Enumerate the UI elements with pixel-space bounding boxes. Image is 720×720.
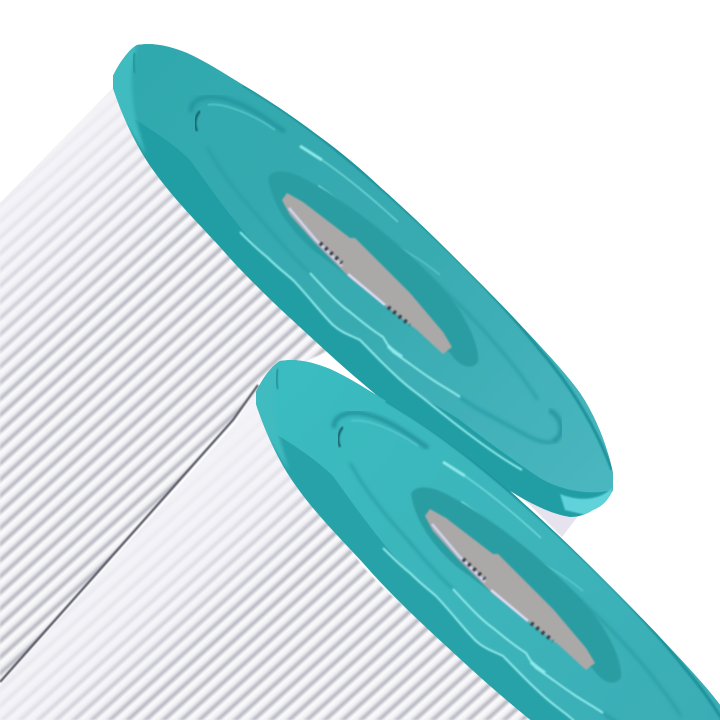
gap shadow between cartridges — [0, 385, 258, 682]
front cartridge teal end cap — [243, 356, 720, 720]
back cartridge white tail under cap — [518, 495, 578, 537]
back cartridge teal end cap — [100, 40, 640, 517]
front cartridge pleated body — [0, 386, 535, 720]
back cartridge pleated body — [0, 88, 330, 682]
